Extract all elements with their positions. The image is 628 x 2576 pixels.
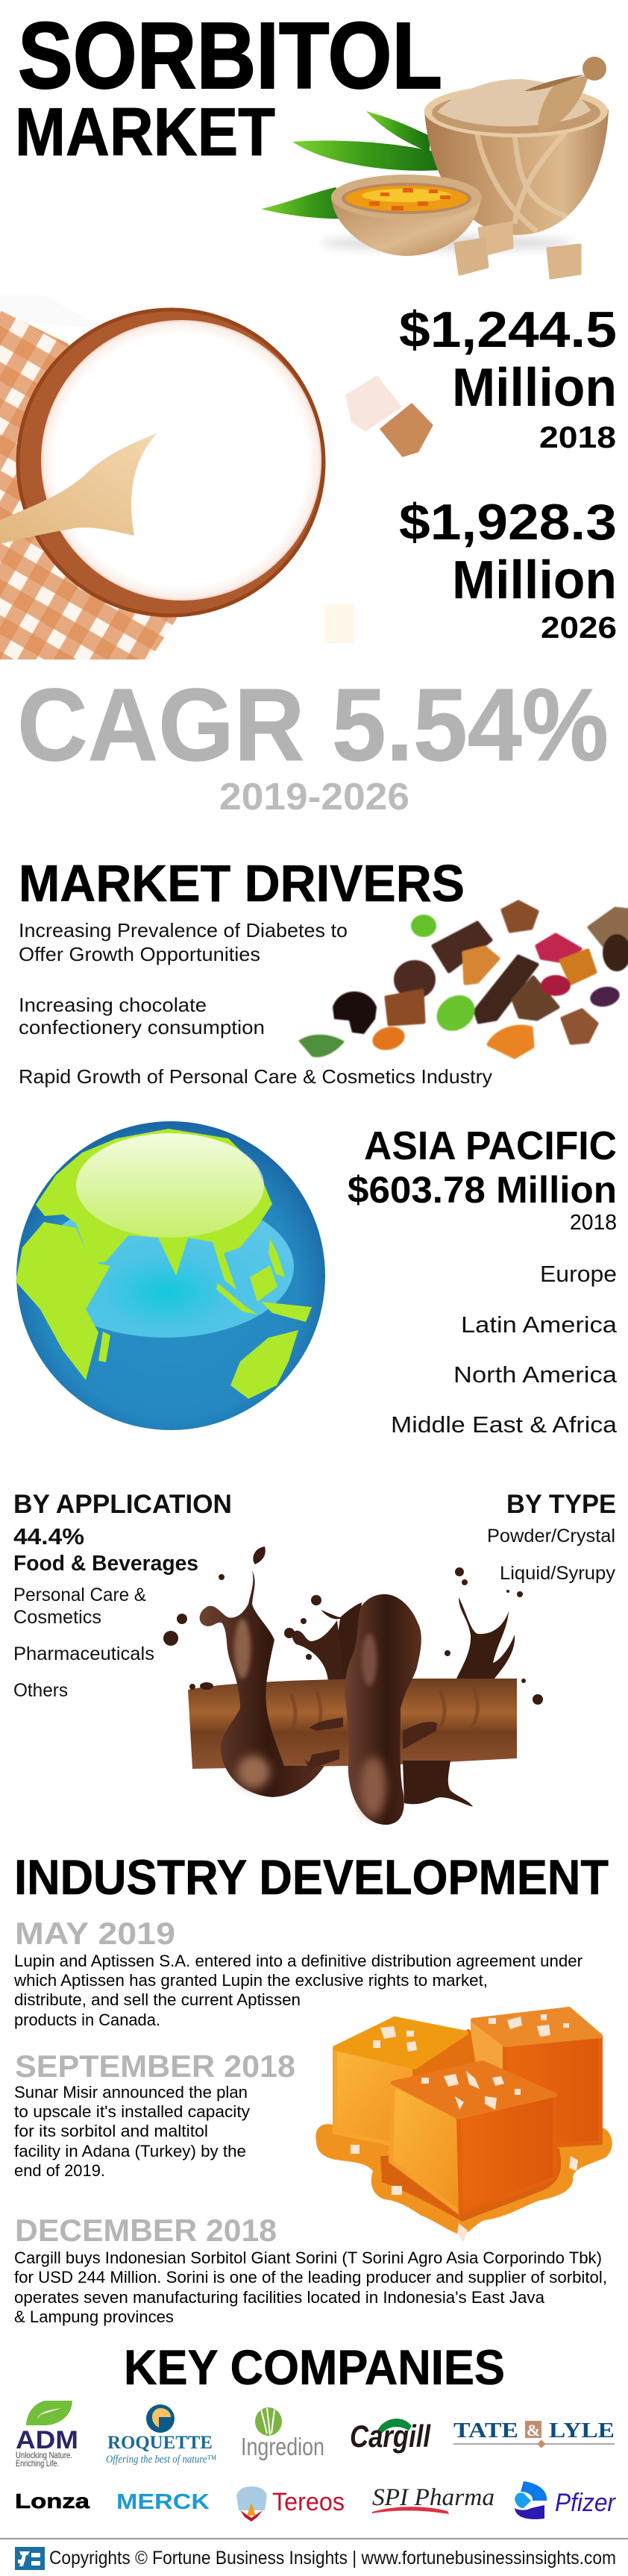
logo: Ingredion bbox=[241, 2407, 324, 2460]
text: by application: Others bbox=[13, 1680, 68, 1701]
logo: Pfizer: Pfizer bbox=[555, 2489, 617, 2517]
stat: 2018 market value: Million bbox=[452, 358, 617, 418]
icon: Fortune Business Insights logo bbox=[15, 2547, 45, 2570]
text: other regions: Latin America bbox=[461, 1311, 618, 1338]
logo: Roquette: ROQUETTE bbox=[107, 2433, 213, 2453]
text: May 2019 development: products in Canada. bbox=[14, 2011, 160, 2029]
text: May 2019 development: MAY 2019 bbox=[15, 1916, 175, 1951]
text: Asia Pacific stat: ASIA PACIFIC bbox=[364, 1124, 617, 1168]
logo: Roquette bbox=[106, 2404, 216, 2466]
text: other regions bbox=[391, 1261, 618, 1438]
illustration: globe bbox=[16, 1121, 325, 1430]
text: by application: 44.4% bbox=[13, 1523, 84, 1549]
heading: key companies: KEY COMPANIES bbox=[124, 2340, 505, 2395]
illustration: wooden bowls with sugar and corn bbox=[261, 57, 609, 278]
stat: 2018 market value: $1,244.5 bbox=[399, 301, 617, 358]
text: by application: Cosmetics bbox=[13, 1607, 101, 1628]
logo: Ingredion: Ingredion bbox=[241, 2433, 324, 2460]
text: December 2018 development: operates seven manufacturing facilities located in Indonesia's East Java bbox=[14, 2288, 545, 2307]
title: SORBITOL bbox=[18, 3, 442, 108]
land: Indonesia and Philippines bbox=[216, 1238, 312, 1322]
text: by application: Food & Beverages bbox=[13, 1552, 198, 1576]
text: September 2018 development: Sunar Misir announced the plan bbox=[14, 2083, 248, 2102]
logo: Tereos: Tereos bbox=[272, 2488, 345, 2516]
logo: Tate and Lyle: & bbox=[527, 2421, 540, 2439]
logo: Tate and Lyle: TATE bbox=[453, 2419, 518, 2442]
heading: market drivers: MARKET DRIVERS bbox=[19, 854, 465, 912]
text: other regions: Europe bbox=[540, 1261, 617, 1287]
text: May 2019 development: which Aptissen has granted Lupin the exclusive rights to market, bbox=[13, 1971, 488, 1990]
text: by type bbox=[487, 1490, 616, 1584]
text: market drivers list: Offer Growth Opportunities bbox=[19, 943, 260, 965]
logo: SPI Pharma: SPI Pharma bbox=[372, 2484, 494, 2511]
text: by application bbox=[13, 1490, 232, 1701]
land: Australia bbox=[230, 1330, 298, 1399]
text: Asia Pacific stat: 2018 bbox=[570, 1211, 617, 1235]
text: September 2018 development: SEPTEMBER 2018 bbox=[15, 2049, 295, 2084]
text: market drivers list bbox=[19, 919, 492, 1088]
logo: Tereos bbox=[236, 2486, 345, 2522]
logo: Tate and Lyle bbox=[453, 2419, 615, 2448]
logo: ADM: Unlocking Nature. bbox=[16, 2450, 72, 2460]
text: September 2018 development bbox=[14, 2049, 295, 2180]
land: Eurasia bbox=[36, 1129, 272, 1290]
logo: Pfizer bbox=[515, 2481, 617, 2519]
text: May 2019 development: distribute, and sell the current Aptissen bbox=[14, 1990, 301, 2009]
logo: Tate and Lyle: LYLE bbox=[549, 2419, 615, 2442]
text: by type: Powder/Crystal bbox=[487, 1526, 615, 1546]
stat: CAGR: 2019-2026 bbox=[219, 775, 409, 818]
photo: bowl of white sugar on checkered cloth bbox=[0, 295, 432, 659]
text: market drivers list: Increasing chocolate bbox=[19, 994, 207, 1016]
text: market drivers list: Increasing Prevalence of Diabetes to bbox=[19, 919, 348, 941]
text: May 2019 development: Lupin and Aptissen S.A. entered into a definitive distribution agreement under bbox=[14, 1952, 583, 1970]
text: December 2018 development: & Lampung provinces bbox=[14, 2307, 174, 2326]
logo: Roquette: Offering the best of nature™ bbox=[106, 2454, 216, 2466]
logo: Merck: MERCK bbox=[116, 2490, 210, 2514]
stat: CAGR: CAGR 5.54% bbox=[17, 668, 609, 783]
illustration: assorted candies bbox=[298, 902, 628, 1057]
logo: ADM: Enriching Life. bbox=[16, 2458, 59, 2469]
text: by application: BY APPLICATION bbox=[13, 1490, 232, 1519]
text: by type: BY TYPE bbox=[506, 1490, 616, 1519]
text: other regions: North America bbox=[453, 1361, 618, 1388]
land: Africa bbox=[16, 1222, 110, 1380]
text: by application: Pharmaceuticals bbox=[13, 1643, 154, 1664]
text: September 2018 development: to upscale it's installed capacity bbox=[14, 2102, 250, 2121]
text: by type: Liquid/Syrupy bbox=[500, 1563, 616, 1584]
text: December 2018 development: DECEMBER 2018 bbox=[15, 2213, 277, 2248]
land: Madagascar bbox=[98, 1332, 110, 1362]
text: December 2018 development bbox=[14, 2213, 607, 2326]
stat: 2026 market value: $1,928.3 bbox=[399, 494, 617, 551]
logo: ADM bbox=[16, 2401, 78, 2469]
text: December 2018 development: for USD 244 Million. Sorini is one of the leading producer and supplier of sorbitol, bbox=[14, 2268, 607, 2287]
text: other regions: Middle East & Africa bbox=[391, 1411, 618, 1438]
title: MARKET bbox=[15, 95, 275, 170]
text: September 2018 development: for its sorbitol and maltitol bbox=[14, 2122, 208, 2140]
text: Asia Pacific stat: $603.78 Million bbox=[348, 1169, 617, 1211]
text: market drivers list: Rapid Growth of Personal Care & Cosmetics Industry bbox=[19, 1065, 492, 1088]
illustration: chocolate bar with splash bbox=[163, 1546, 543, 1825]
stat: 2018 market value bbox=[399, 301, 617, 454]
stat: 2026 market value bbox=[399, 494, 617, 645]
text: December 2018 development: Cargill buys Indonesian Sorbitol Giant Sorini (T Sorini Agro Asia Corporindo Tbk) bbox=[14, 2248, 602, 2267]
stat: 2026 market value: Million bbox=[452, 551, 617, 610]
text: May 2019 development bbox=[13, 1916, 583, 2029]
logo: Cargill: Cargill bbox=[350, 2419, 431, 2454]
text: September 2018 development: end of 2019. bbox=[14, 2161, 105, 2180]
text: Asia Pacific stat bbox=[348, 1124, 617, 1235]
title bbox=[15, 3, 442, 170]
text: by application: Personal Care & bbox=[13, 1585, 146, 1605]
text: market drivers list: confectionery consumption bbox=[19, 1016, 265, 1038]
logo: ADM: ADM bbox=[16, 2426, 78, 2454]
logo: Lonza: Lonza bbox=[15, 2489, 90, 2513]
stat: 2026 market value: 2026 bbox=[541, 610, 617, 645]
droplets bbox=[163, 1546, 543, 1705]
text: September 2018 development: facility in Adana (Turkey) by the bbox=[14, 2142, 246, 2160]
highlight bbox=[76, 1133, 264, 1238]
stat: 2018 market value: 2018 bbox=[539, 420, 616, 454]
illustration: salted caramel cubes bbox=[315, 2009, 612, 2243]
